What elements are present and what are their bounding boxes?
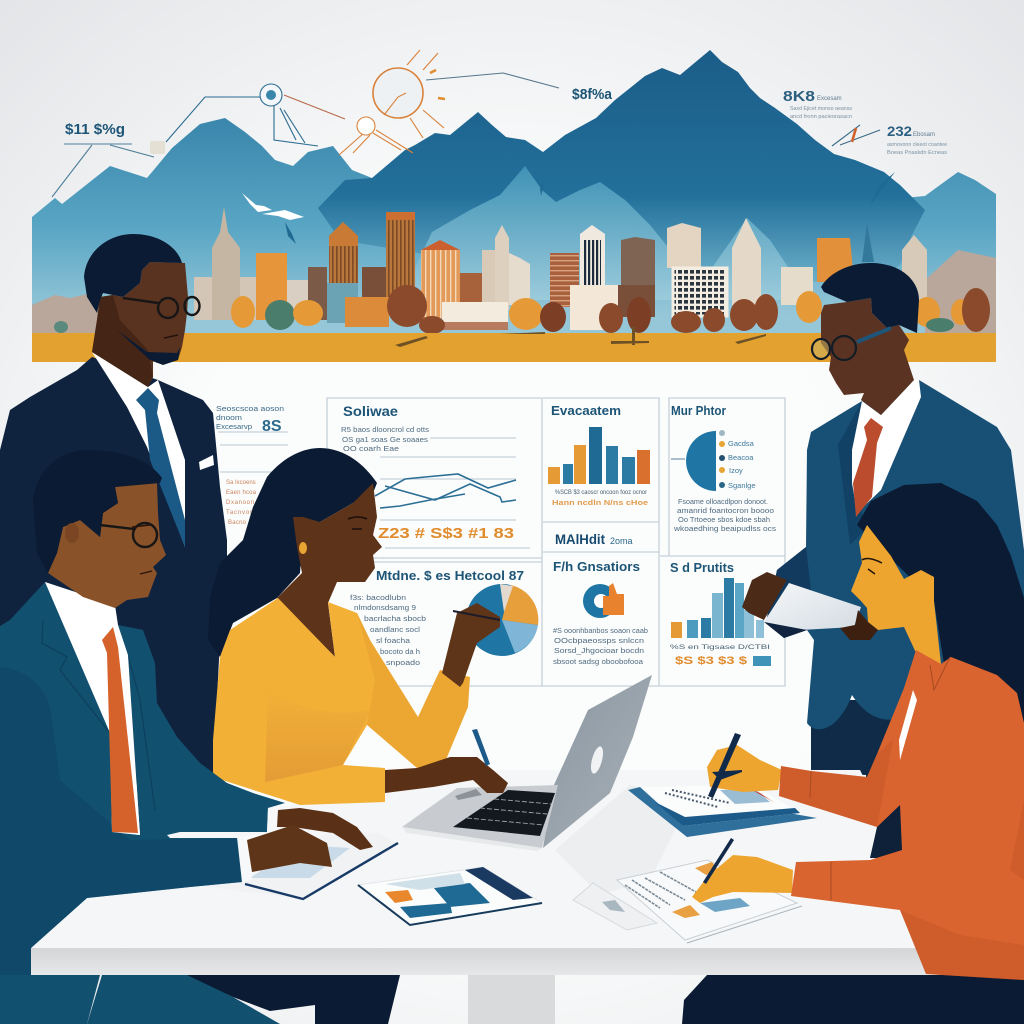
panel: pie legend: wkoaedhing beaipudlss ocs	[673, 526, 777, 533]
table	[31, 770, 926, 1024]
blouse shading	[265, 690, 371, 782]
panel: gnsatiors icon	[553, 559, 648, 666]
callout: right figure: Saxd Ejicet monso aeanss	[790, 106, 852, 112]
callout: far right figure: Boeas Pnaskdn Ecneas	[887, 150, 947, 156]
suit	[766, 380, 1024, 760]
lapel shade	[838, 401, 865, 545]
hair	[84, 234, 182, 313]
callout: far right figure	[887, 123, 947, 156]
head and neck	[48, 483, 166, 608]
ground	[32, 333, 996, 362]
lower cuff	[237, 837, 252, 882]
upper cuff	[267, 805, 285, 832]
panel: pie legend: Mur Phtor	[671, 403, 726, 418]
panel: left notes: Dxanoon	[226, 500, 254, 506]
pocket square	[199, 455, 214, 470]
hair	[33, 450, 162, 573]
panel: left notes: Eaen hcoa	[226, 490, 257, 496]
jacket shading	[779, 740, 1024, 980]
booklet right	[628, 785, 817, 837]
panel: pie chart notes	[350, 568, 538, 667]
hair	[821, 263, 919, 333]
glasses	[812, 328, 891, 360]
right pale ridge	[700, 218, 810, 300]
panel heading: mid strip	[555, 531, 633, 547]
navy gap	[870, 800, 902, 858]
sleeve shadow	[766, 547, 812, 638]
jacket	[779, 650, 1024, 980]
panel: profits bar chart: S d Prutits	[670, 560, 734, 575]
hand	[742, 572, 787, 620]
typing forearm and pen	[385, 729, 508, 793]
panel: software line chart: OS ga1 soas Ge soaaes	[342, 435, 428, 444]
panel: pie chart notes: nlmdonsdsamg 9	[354, 605, 416, 612]
panel: left notes: Tacnvor	[226, 510, 252, 516]
panel: data dashboard on wall	[216, 398, 785, 686]
hair	[208, 448, 377, 657]
tie	[853, 418, 883, 517]
panel: pie chart notes: f3s: bacodlubn	[350, 595, 406, 602]
callout: right figure: ancd fronn pacieorasacn	[790, 114, 852, 120]
panel: left notes: Seoscscoa aoson	[216, 406, 284, 413]
trousers navy	[187, 975, 400, 1024]
panel: pie chart notes: bocoto da h	[380, 649, 420, 656]
panel: pie legend: Beacoa	[728, 453, 754, 462]
panel: left notes: Excesarvp	[216, 424, 252, 431]
tablet left	[192, 832, 398, 899]
panel: pie chart notes: bacrlacha sbocb	[364, 616, 426, 623]
trousers blue	[87, 975, 280, 1024]
neck and head	[821, 298, 914, 415]
callout: far right figure: asmovonn cleeot coantee	[887, 142, 947, 148]
callout: centre figure: $8f%a	[572, 86, 613, 103]
snow marks	[242, 193, 304, 220]
suit	[0, 582, 285, 1024]
panel: software line chart: OO coarh Eae	[343, 444, 399, 453]
brow and mouth	[132, 525, 152, 574]
person: front left man	[0, 450, 400, 1024]
callout: left figure: $11 $%g	[65, 121, 125, 138]
paper	[764, 583, 861, 630]
table gap between arms	[167, 832, 267, 838]
shirt	[852, 380, 921, 513]
panel: left notes: Bacno	[228, 520, 247, 526]
neck and face	[277, 483, 382, 657]
panel: software line chart: R5 baos dlooncrol cd otts	[341, 425, 429, 434]
shirt	[45, 582, 140, 835]
callout: far right figure: Ebosam	[913, 132, 935, 138]
panel: software line chart: Z23 # S$3 #1 83	[378, 525, 514, 542]
panel: gnsatiors icon: sbsoot sadsg oboobofooa	[553, 659, 643, 666]
callout: right figure: 8K8	[783, 88, 815, 105]
face	[851, 525, 941, 666]
panel: pie chart notes: snpoado	[386, 660, 420, 667]
panel: profits bar chart: %S en Tigsase D/CTBI	[670, 644, 770, 651]
lid	[543, 675, 652, 848]
booklet centre	[358, 867, 542, 925]
grey hills	[32, 250, 996, 334]
panel: software line chart: Soliwae	[343, 403, 398, 419]
data callouts above mountains	[52, 50, 880, 197]
panel: profits bar chart	[670, 560, 771, 667]
glasses	[123, 297, 200, 318]
mouth	[164, 335, 178, 338]
skyscrapers	[194, 207, 927, 330]
panel: mountain and city skyline banner	[32, 50, 996, 362]
panel: software line chart	[341, 403, 530, 548]
panel: pie legend: Oo Trtoeoe sbos kdoe sbah	[678, 517, 770, 524]
shirt	[92, 352, 185, 547]
legs	[811, 700, 905, 860]
blouse body	[213, 598, 385, 805]
panel: left notes: 8S	[262, 418, 282, 435]
tie	[102, 627, 138, 833]
panel: bar chart: Hann ncdln N/ns cHoe	[552, 498, 648, 507]
raised forearm and hand	[442, 603, 500, 687]
earring	[299, 542, 307, 554]
panel: left notes	[216, 406, 284, 526]
hair	[857, 483, 1024, 725]
person: standing man left	[0, 234, 227, 790]
base	[402, 785, 558, 848]
person: yellow blouse woman	[208, 448, 500, 805]
panel: left notes: dnoom	[216, 415, 242, 422]
panel: profits bar chart: $S $3 $3 $	[675, 655, 747, 667]
trackpad	[455, 789, 482, 800]
panel: pie chart notes: oandlanc socl	[370, 627, 421, 634]
tie	[136, 388, 185, 547]
callout: right figure: Excesam	[817, 96, 842, 102]
pen in raised hand	[453, 611, 500, 620]
callout: far right figure: 232	[887, 123, 912, 139]
lapels	[42, 620, 155, 810]
panel: pie chart notes: Mtdne. $ es Hetcool 87	[376, 568, 524, 583]
logo	[589, 745, 605, 775]
person: standing man right	[742, 263, 1024, 860]
panel heading: mid strip: MAlHdit	[555, 531, 605, 547]
autumn trees	[54, 285, 990, 334]
panel: pie legend: Sganlge	[728, 481, 756, 490]
panel: left notes: Sa Ixcoens	[226, 480, 256, 486]
laptop	[402, 675, 652, 851]
legs	[682, 975, 1024, 1024]
keyboard	[453, 790, 555, 836]
panel: bar chart: Evacaatem	[551, 403, 621, 418]
lower hand	[247, 825, 332, 872]
paper shadow	[764, 622, 807, 638]
suit	[0, 357, 227, 790]
glasses	[100, 523, 157, 547]
panel: pie legend: Fsoame olloacdlpon donoot.	[678, 499, 768, 506]
raised sleeve	[357, 613, 470, 768]
hand with pen on booklet	[707, 733, 782, 798]
callout: right figure	[783, 88, 852, 120]
cuffs	[810, 657, 950, 900]
icon: small device node	[150, 141, 165, 154]
panel: pie legend: Gacdsa	[728, 439, 755, 448]
upper hand	[277, 808, 373, 850]
eye and brow	[348, 517, 367, 529]
blouse strip	[899, 690, 917, 760]
papers right	[573, 860, 802, 943]
panel: gnsatiors icon: Sorsd_Jhgocioar bocdn	[554, 648, 644, 655]
jaw shadow	[92, 295, 153, 387]
panel: pie legend: amanrid foantocron boooo	[677, 508, 774, 515]
ear	[65, 523, 79, 543]
panel: gnsatiors icon: OOcbpaeossps snlccn	[554, 638, 644, 645]
beard shadow of man behind	[840, 610, 878, 640]
panel: bar chart	[548, 403, 650, 507]
panel: gnsatiors icon: #S ooonhbanbos soaon caab	[553, 628, 648, 635]
front dark mountain range	[318, 50, 925, 285]
dark jacket shading	[0, 667, 242, 975]
beard	[117, 330, 180, 365]
panel: pie legend: Izoy	[729, 466, 743, 475]
panel: gnsatiors icon: F/h Gnsatiors	[553, 559, 640, 574]
neck and head	[92, 262, 188, 387]
back light mountain range	[32, 118, 996, 334]
panel heading: mid strip: 2oma	[610, 536, 633, 546]
panel: pie chart notes: sl foacha	[376, 638, 410, 645]
person: front right woman	[682, 483, 1024, 1024]
inner pale ridges	[400, 166, 720, 300]
panel frames	[218, 398, 785, 686]
panel: pie legend	[671, 403, 777, 533]
panel: bar chart: %SCB $3 caoscr oncoon fooz ocnor	[555, 490, 647, 496]
brow and eye	[862, 559, 882, 574]
hand with pen on papers	[692, 838, 793, 903]
